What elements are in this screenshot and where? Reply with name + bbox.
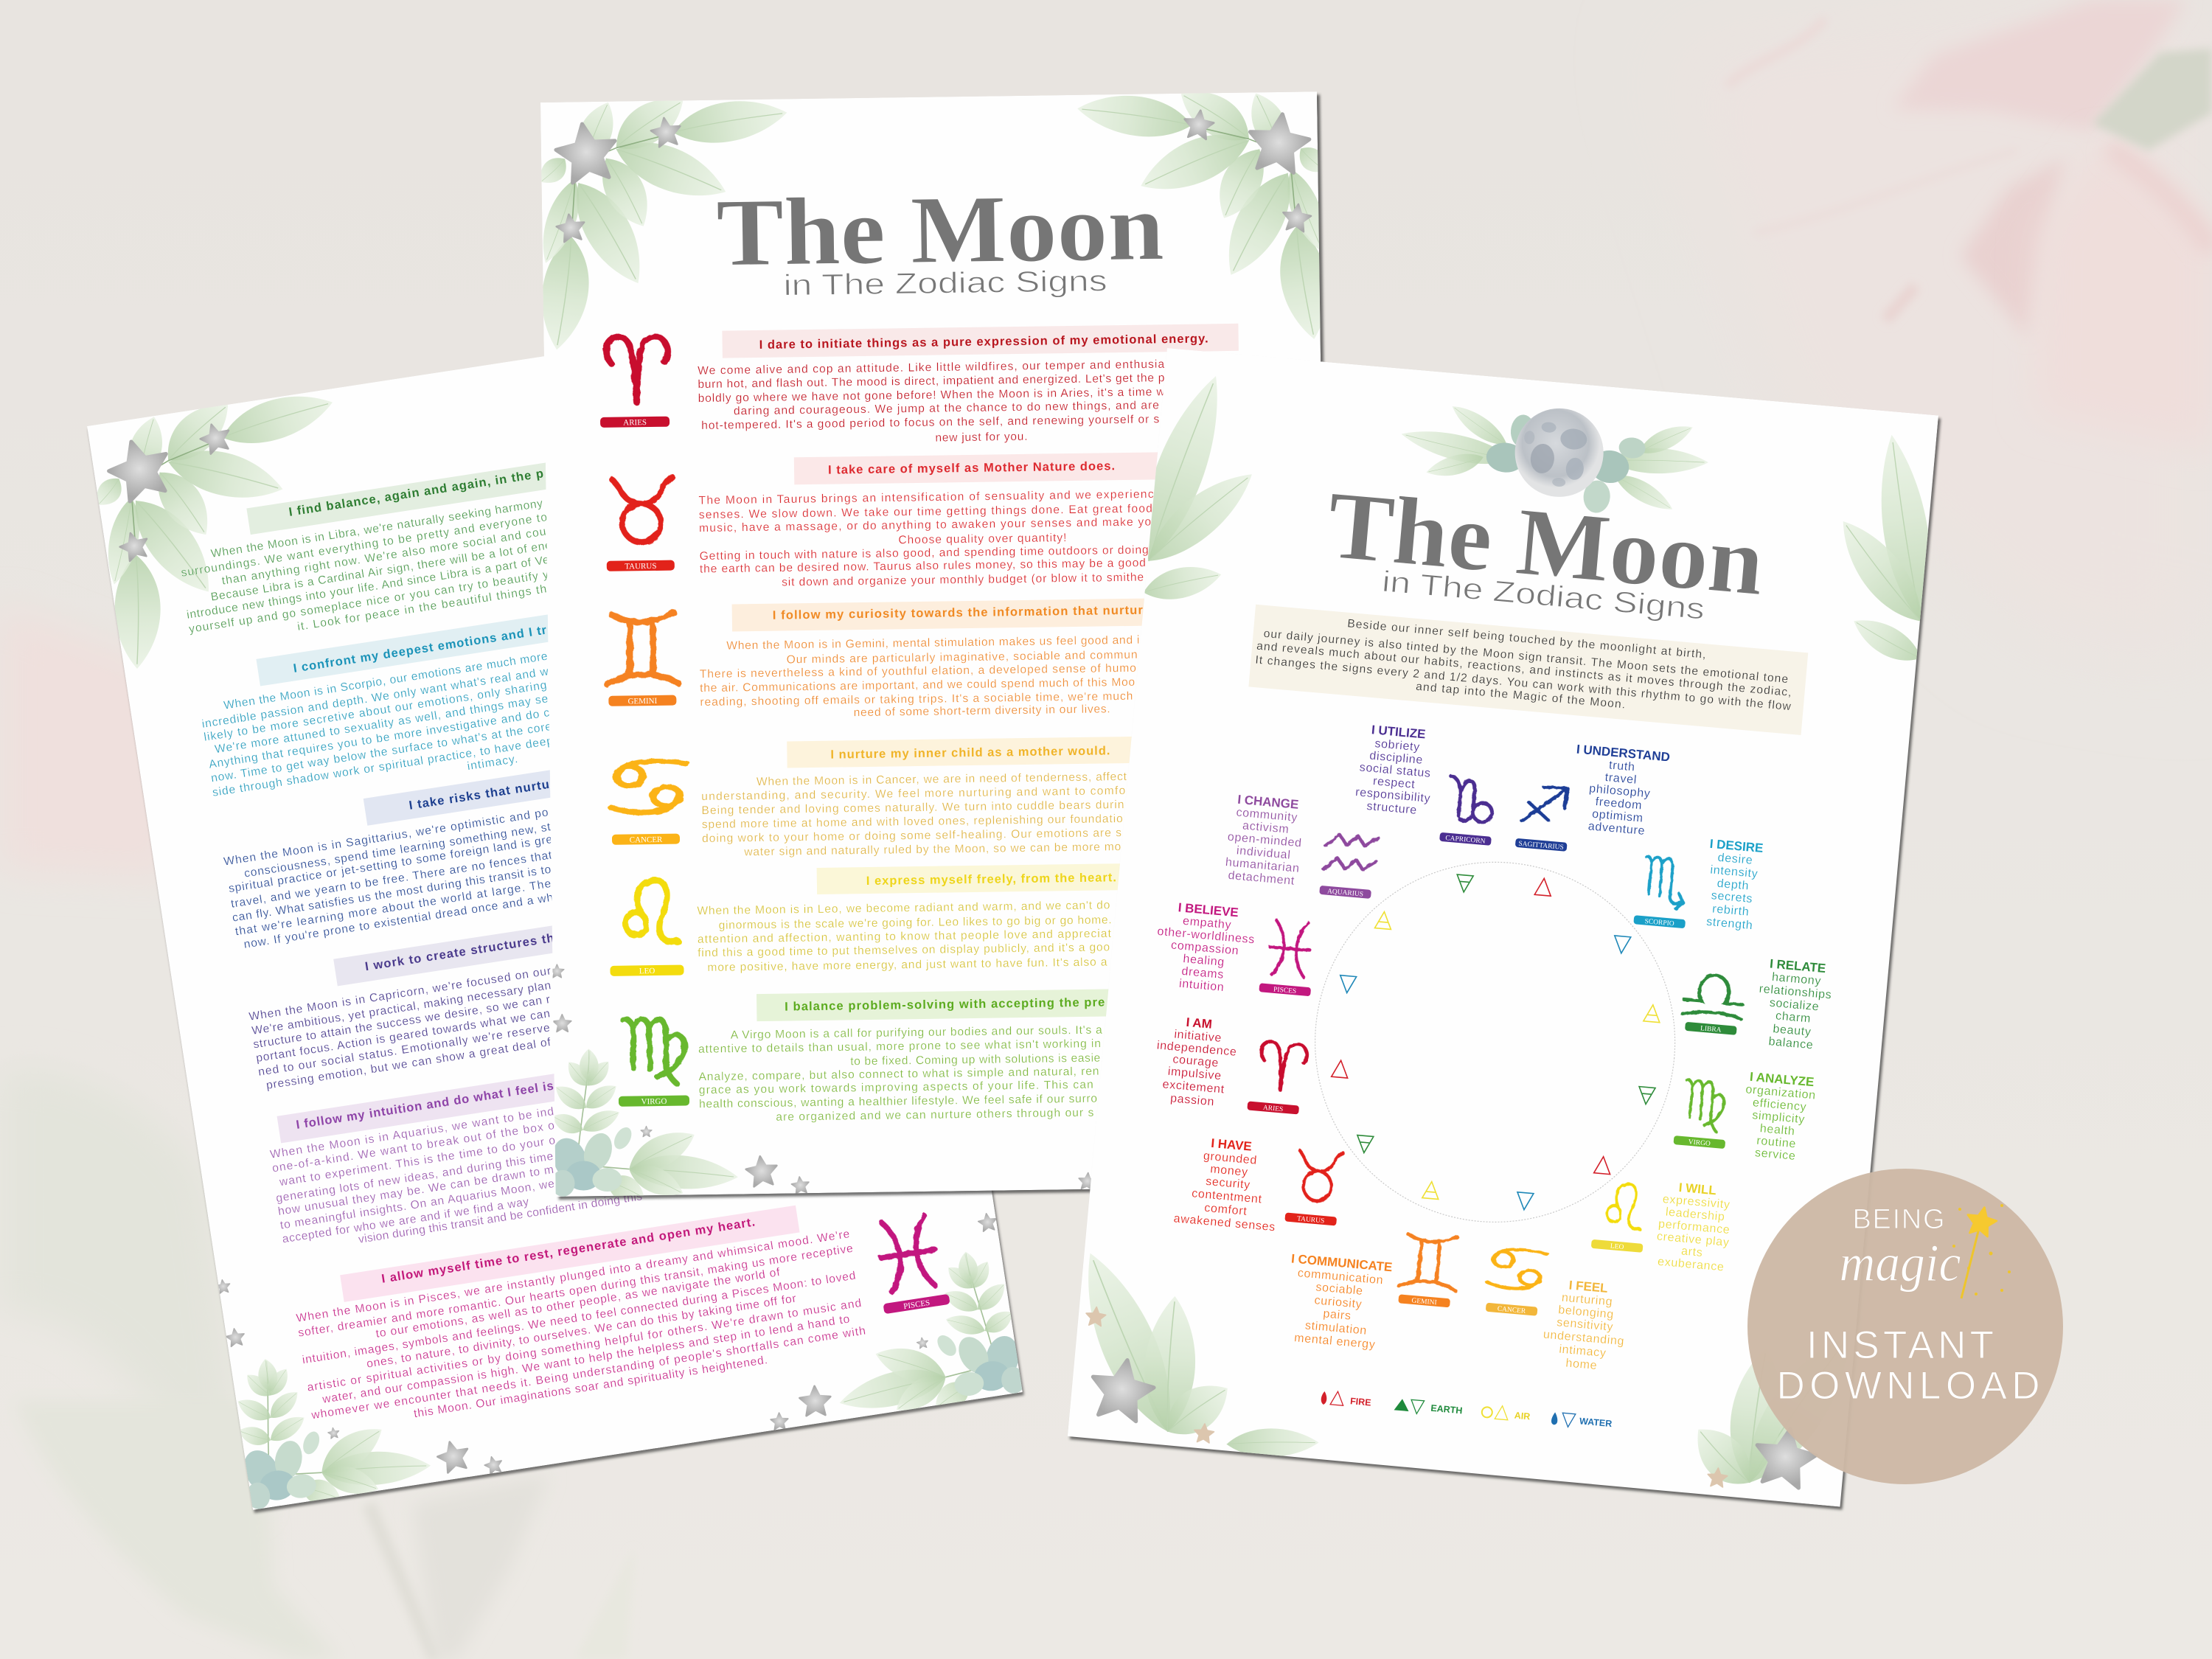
sign: Libra: balance (1768, 1035, 1814, 1051)
sign: Libra: socialize (1769, 997, 1820, 1013)
sign: Aries: courage (1172, 1053, 1220, 1070)
section: Libra (181, 463, 547, 636)
sign: Sagittarius: SAGITTARIUS (1518, 841, 1564, 852)
section: Aries: We come alive and cop an attitude. Like little wildfires, our temper and enthusia (698, 358, 1165, 378)
icon: Aries glyph (606, 336, 668, 403)
section: Capricorn: When the Moon is in Capricorn, we're focused on our (248, 964, 552, 1023)
subtitle: in The Zodiac Signs (783, 265, 1107, 302)
section: Virgo: Analyze, compare, but also connect to what is simple and natural, ren (698, 1065, 1099, 1083)
sign: Aries: independence (1156, 1039, 1237, 1059)
sign: Aquarius: AQUARIUS (1327, 888, 1363, 898)
badge: being magic instant download (1747, 1169, 2063, 1484)
sign: Pisces: intuition (1178, 978, 1225, 994)
section: Cancer (700, 737, 1135, 859)
sign: Capricorn: social status (1359, 761, 1431, 780)
sign: Virgo: VIRGO (1688, 1138, 1711, 1148)
section: Taurus: senses. We slow down. We take our time getting things done. Eat great food (699, 502, 1152, 521)
sign: Aries: impulsive (1167, 1065, 1222, 1082)
sign: Gemini (1284, 1222, 1461, 1358)
section: Scorpio: side through shadow work or spiritual practice, to have deep (212, 734, 554, 799)
icon: Leo glyph (625, 880, 678, 942)
label: DOWNLOAD: DOWNLOAD (1777, 1364, 2039, 1408)
intro text box: and reveals much about our habits, reactions, and instincts as it moves through the zodiac, (1256, 640, 1792, 699)
sign: Taurus: money (1210, 1163, 1248, 1179)
section: Taurus: the earth can be desired now. Taurus also rules money, so this may be a good (700, 557, 1146, 576)
sign: Leo: performance (1658, 1218, 1731, 1237)
sign: Sagittarius: adventure (1587, 820, 1646, 838)
section: Aquarius: When the Moon is in Aquarius, we want to be ind (269, 1105, 554, 1161)
section: Leo: When the Moon is in Leo, we become radiant and warm, and we can't do (697, 899, 1110, 917)
legend: elements: FIRE (1350, 1396, 1371, 1408)
section: Taurus: I take care of myself as Mother Nature does. (828, 459, 1115, 477)
sign: Gemini: sociable (1315, 1281, 1363, 1298)
label: Pisces: PISCES (902, 1298, 931, 1311)
section: Scorpio (202, 615, 550, 796)
section: Taurus: The Moon in Taurus brings an intensification of sensuality and we experienc (698, 488, 1154, 507)
section: Sagittarius: I take risks that nurtu (408, 778, 550, 813)
section: Gemini: Our minds are particularly imaginative, sociable and commun (787, 649, 1138, 666)
section: Pisces: When the Moon is in Pisces, we are instantly plunged into a dreamy and whimsical mood. We're (296, 1228, 850, 1325)
sign: Libra: harmony (1771, 971, 1822, 988)
sign: Cancer: nurturing (1561, 1292, 1613, 1309)
sign: Gemini: mental energy (1294, 1332, 1376, 1352)
sign: Leo (1590, 1173, 1734, 1274)
sign: Libra: charm (1775, 1009, 1812, 1026)
section: Scorpio: now. Time to get way below the surface to what's at the core (210, 720, 552, 785)
section: Leo: more positive, have more energy, and just want to have fun. It's also a (707, 956, 1107, 974)
sign: Aquarius: activism (1242, 819, 1290, 836)
section: Virgo: to be fixed. Coming up with solutions is easie (850, 1052, 1100, 1068)
section: Gemini: the air. Communications are important, and we could spend much of this Moo (700, 676, 1135, 695)
section: Gemini: There is nevertheless a kind of youthful elation, a developed sense of humo (700, 662, 1136, 681)
sign: Gemini: curiosity (1314, 1294, 1363, 1311)
sign: Scorpio: rebirth (1712, 902, 1750, 919)
sign: Scorpio: SCORPIO (1644, 918, 1674, 928)
sign: Libra: beauty (1773, 1023, 1812, 1039)
section: Libra: surroundings. We want everything to be pretty and everyone to (180, 511, 548, 580)
label: Aries: ARIES (623, 418, 647, 428)
section: Cancer: doing work to your home or doing some self-healing. Our emotions are s (702, 827, 1121, 845)
section: Pisces: I allow myself time to rest, regenerate and open my heart. (380, 1216, 756, 1286)
sign: Pisces: healing (1183, 953, 1225, 969)
sign: Aries: excitement (1162, 1078, 1225, 1096)
sign: Capricorn: sobriety (1374, 737, 1421, 754)
sign: Scorpio: strength (1705, 916, 1753, 932)
chart: zodiac wheel circle (1300, 847, 1690, 1237)
sign: Virgo: efficiency (1752, 1096, 1807, 1114)
sign: Aries: I AM (1186, 1015, 1213, 1032)
sign: Sagittarius (1515, 737, 1671, 860)
illustration: moon with eucalyptus (1394, 393, 1713, 522)
panel: right sheet, zodiac wheel (1047, 346, 1959, 1514)
section: Libra: Because Libra is a Cardinal Air sign, there will be a lot of ene (210, 539, 552, 604)
section: Aquarius (270, 1074, 641, 1243)
sign: Pisces: I BELIEVE (1178, 900, 1239, 919)
brand: magic script: magic (1839, 1234, 1961, 1293)
section: Sagittarius: can fly. What satisfies us the most during this transit is to (232, 863, 552, 925)
section: Pisces: softer, dreamier and more romantic. Our hearts open during this transit, making us more receptive (297, 1242, 854, 1340)
section: Libra: it. Look for peace in the beautiful things that (296, 581, 559, 633)
sign: Cancer: belonging (1558, 1304, 1615, 1321)
label: Pisces (883, 1294, 950, 1314)
section: Aquarius: accepted for who we are and if we find a way (282, 1196, 530, 1246)
section: Capricorn: We're ambitious, yet practical, making necessary plan (251, 979, 552, 1037)
section: Leo: attention and affection, wanting to know that people love and appreciat (698, 928, 1112, 946)
sign: Taurus: comfort (1204, 1202, 1248, 1218)
sign: Pisces: dreams (1181, 965, 1225, 981)
sign: Cancer: I FEEL (1568, 1278, 1608, 1295)
subtitle: in The Zodiac Signs (1381, 566, 1706, 626)
sign: Aquarius: individual (1236, 844, 1291, 862)
brand: BEING: BEING (1852, 1204, 1945, 1235)
sign: Cancer: understanding (1543, 1329, 1625, 1348)
section: Pisces: this Moon. Our imaginations soar and spirituality is heightened. (413, 1354, 768, 1420)
sign: Capricorn: discipline (1369, 750, 1424, 767)
sign: Capricorn (1352, 722, 1500, 846)
icon: Taurus glyph (611, 477, 672, 543)
sign: Capricorn: structure (1366, 800, 1418, 817)
sign: Virgo: health (1759, 1122, 1795, 1138)
section: Pisces (296, 1205, 866, 1419)
intro text box: It changes the signs every 2 and 1/2 days. You can work with this rhythm to go with the flow (1255, 654, 1792, 713)
legend: elements: EARTH (1430, 1403, 1463, 1416)
section: Aries (697, 324, 1240, 448)
sign: Taurus: security (1206, 1175, 1251, 1192)
sign: Libra: relationships (1759, 983, 1832, 1001)
section: Virgo: attentive to details than usual, more prone to see what isn't working in (698, 1037, 1101, 1056)
sign: Virgo: simplicity (1752, 1109, 1806, 1126)
sign: Cancer: CANCER (1497, 1306, 1526, 1315)
sign: Cancer (1481, 1247, 1632, 1374)
sign: Scorpio: desire (1717, 852, 1753, 867)
section: Taurus: Choose quality over quantity! (898, 532, 1067, 546)
section: Taurus: Getting in touch with nature is also good, and spending time outdoors or doing (700, 544, 1149, 563)
icon: magic wand (1952, 1204, 2011, 1298)
sign: Pisces: PISCES (1273, 986, 1297, 995)
section: Taurus: music, have a massage, or do anything to awaken your senses and make yo (699, 516, 1152, 535)
section: Sagittarius: spiritual practice or jet-setting to some foreign land is gre (228, 833, 553, 895)
section: Cancer: I nurture my inner child as a mother would. (830, 744, 1110, 762)
section: Sagittarius: now. If you're prone to existential dread once and a wh (243, 891, 554, 951)
sign: Leo: arts (1680, 1245, 1703, 1259)
section: Sagittarius: consciousness, spend time learning something new, st (243, 821, 552, 880)
sign: Aries: ARIES (1262, 1105, 1284, 1113)
chart: element triangles on the wheel (1321, 861, 1673, 1220)
section: Scorpio: When the Moon is in Scorpio, our emotions are much more (223, 650, 549, 712)
section: Aries: hot-tempered. It's a good period to focus on the self, and renewing yourself or s (701, 413, 1160, 432)
section: Sagittarius (223, 770, 552, 948)
section: Aquarius: want to experiment. This is the time to do your o (278, 1134, 556, 1189)
sign: Virgo: organization (1745, 1083, 1816, 1102)
section: Capricorn: structure to attain the success we desire, so we can r (252, 993, 551, 1051)
section: Aries: new just for you. (935, 431, 1028, 445)
section: Taurus: sit down and organize your monthly budget (or blow it to smithe (782, 571, 1144, 589)
section: Sagittarius: When the Moon is in Sagittarius, we're optimistic and po (223, 806, 549, 869)
section: Aquarius: to meaningful insights. On an Aquarius Moon, we (279, 1178, 555, 1232)
icon: Cancer glyph (611, 761, 686, 813)
sign: Sagittarius: optimism (1592, 808, 1644, 825)
sign: Sagittarius: freedom (1595, 796, 1643, 813)
label: Virgo: VIRGO (641, 1097, 667, 1106)
section: Pisces: artistic or spiritual activities or by doing something helpful for others. We're drawn to music and (306, 1297, 862, 1394)
section: Cancer: understanding, and security. We feel more nurturing and want to comfo (701, 785, 1126, 803)
title: The Moon (716, 173, 1165, 287)
intro text box: Beside our inner self being touched by the moonlight at birth, (1347, 617, 1706, 661)
section: Libra: I find balance, again and again, in the p (288, 467, 544, 519)
section: Scorpio: Anything that requires you to be more investigative and do c (208, 706, 551, 771)
sign: Sagittarius: truth (1608, 759, 1635, 773)
sign: Taurus: TAURUS (1297, 1215, 1325, 1225)
sign: Scorpio: I DESIRE (1709, 837, 1764, 855)
sign: Aquarius: detachment (1228, 869, 1295, 888)
sign: Taurus (1173, 1133, 1343, 1239)
sign: Gemini: stimulation (1304, 1319, 1368, 1338)
section: Cancer: water sign and naturally ruled by the Moon, so we can be more mo (743, 841, 1121, 858)
section: Scorpio: intimacy. (467, 753, 518, 773)
icon: Gemini glyph (606, 612, 679, 684)
section: Pisces: to our emotions, as well as to other people, as we navigate the world of (375, 1266, 781, 1340)
section: Cancer: When the Moon is in Cancer, we are in need of tenderness, affect (757, 771, 1127, 788)
section: Virgo: are organized and we can nurture others through our s (776, 1107, 1094, 1124)
section: Aries: boldly go where we have not gone before! When the Moon is in Aries, it's a time w (698, 386, 1166, 405)
sign: Aquarius: humanitarian (1225, 856, 1300, 875)
sign: Cancer: sensitivity (1557, 1316, 1614, 1334)
section: Taurus (698, 452, 1194, 590)
sign: Gemini: I COMMUNICATE (1290, 1251, 1393, 1274)
section: Aries: burn hot, and flash out. The mood is direct, impatient and energized. Let's get the p (698, 372, 1165, 391)
legend: elements: AIR (1514, 1411, 1531, 1422)
intro text box (1248, 605, 1808, 735)
sign: Virgo (1673, 1063, 1818, 1164)
sign: Leo: leadership (1665, 1206, 1725, 1223)
section: Capricorn: portant focus. Action is geared towards what we can (255, 1007, 551, 1065)
section: Leo: ginormous is the scale we're going for. Leo likes to go big or go home. (719, 914, 1112, 932)
sign: Leo: I WILL (1678, 1180, 1717, 1197)
sign: Pisces: empathy (1182, 915, 1232, 932)
label: Cancer (612, 834, 680, 845)
sign: Capricorn: CAPRICORN (1445, 835, 1486, 846)
intro text box: and tap into the Magic of the Moon. (1416, 681, 1626, 711)
sign: Capricorn: respect (1372, 775, 1416, 791)
sign: Taurus: I HAVE (1211, 1136, 1253, 1154)
sign: Gemini: GEMINI (1411, 1297, 1437, 1307)
sign: Sagittarius: I UNDERSTAND (1576, 742, 1671, 765)
section: Virgo: grace as you work towards improving aspects of your life. This can (699, 1079, 1093, 1096)
sign: Libra: I RELATE (1769, 956, 1826, 975)
sign: Cancer: intimacy (1559, 1343, 1607, 1360)
section: Gemini (699, 598, 1161, 721)
section: Aries: I dare to initiate things as a pure expression of my emotional energy. (759, 332, 1208, 352)
section: Scorpio: We're more attuned to sexuality as well, and things may se (214, 692, 549, 756)
sign: Cancer: home (1565, 1357, 1598, 1372)
section: Virgo (698, 989, 1127, 1124)
panel: left sheet, second half of the sign interpretations (75, 291, 1032, 1525)
section: Pisces: intuition, images, symbols and feelings. We need to feel connected during a Pisces Moon: to loved (302, 1270, 857, 1366)
section: Aquarius: one-of-a-kind. We want to break out of the box o (271, 1119, 555, 1175)
sign: Virgo: service (1754, 1147, 1796, 1163)
section: Libra: than anything right now. We're also more social and coul (221, 525, 550, 588)
sign: Scorpio: secrets (1711, 889, 1753, 905)
sign: Gemini: communication (1297, 1267, 1384, 1287)
section: Leo: I express myself freely, from the heart. (866, 871, 1116, 888)
section: Virgo: A Virgo Moon is a call for purifying our bodies and our souls. It's a (731, 1024, 1102, 1042)
label: Leo: LEO (639, 967, 655, 975)
label: Taurus (607, 560, 675, 571)
section: Gemini: reading, shooting off emails or taking trips. It's a sociable time, we're much (700, 690, 1133, 709)
sign: Aquarius (1223, 792, 1381, 900)
label: Gemini: GEMINI (627, 697, 658, 706)
label: Leo (610, 965, 684, 976)
section: Libra: introduce new things into your life. And since Libra is a part of Ver (186, 553, 554, 622)
section: Capricorn: ned to our social status. Emotionally we're reserve (257, 1022, 551, 1079)
label: INSTANT: INSTANT (1806, 1324, 1994, 1367)
section: Gemini: I follow my curiosity towards the information that nurtur (773, 604, 1144, 622)
sign: Aries: initiative (1174, 1028, 1222, 1045)
section: Leo: find this a good time to put themselves on display publicly, and it's a goo (698, 941, 1110, 959)
sign: Scorpio: depth (1717, 877, 1750, 893)
intro text box: our daily journey is also tinted by the Moon sign transit. The Moon sets the emotional tone (1263, 627, 1789, 686)
legend: elements: WATER (1579, 1416, 1613, 1429)
section: Aquarius: how unusual they may be. We can be drawn to m (277, 1164, 554, 1218)
label: Taurus: TAURUS (625, 562, 656, 571)
sign: Taurus: contentment (1192, 1187, 1262, 1206)
section: Cancer: Being tender and loving comes naturally. We turn into cuddle bears durin (701, 799, 1124, 817)
title: The Moon (1324, 471, 1768, 616)
icon: Virgo glyph (622, 1018, 685, 1085)
section: Capricorn (248, 926, 553, 1091)
sign: Capricorn: responsibility (1355, 786, 1431, 805)
sign: Scorpio (1633, 831, 1764, 935)
section: Virgo: I balance problem-solving with accepting the pre (785, 996, 1105, 1014)
section: Aquarius: vision during this transit and be confident in doing this (358, 1190, 643, 1246)
section: Aquarius: I follow my intuition and do what I feel is (295, 1079, 554, 1132)
section: Capricorn: I work to create structures th (364, 931, 555, 973)
label: Virgo (619, 1095, 689, 1107)
label: Cancer: CANCER (630, 835, 663, 845)
panel: middle sheet, The Moon in The Zodiac Signs (531, 75, 1349, 1210)
section: Leo (697, 863, 1143, 974)
section: Cancer: spend more time at home and with loved ones, replenishing our foundatio (702, 813, 1123, 831)
sign: Aquarius: I CHANGE (1237, 793, 1299, 812)
sign: Leo: exuberance (1657, 1256, 1725, 1274)
section: Sagittarius: travel, and we yearn to be free. There are no fences that (230, 849, 553, 911)
section: Sagittarius: that we're learning more about the world at large. The (234, 877, 552, 938)
legend: elements (1321, 1390, 1613, 1431)
label: Aries (600, 417, 669, 428)
sign: Taurus: grounded (1203, 1150, 1258, 1167)
sign: Virgo: routine (1756, 1135, 1797, 1150)
section: Libra: yourself up and go someplace nice or you can try to beautify yo (188, 567, 557, 636)
sign: Taurus: awakened senses (1173, 1212, 1276, 1234)
sign: Sagittarius: travel (1604, 771, 1638, 787)
section: Pisces: water, and our compassion is high. We want to help the helpless and step in to lend a hand to (321, 1313, 851, 1406)
sign: Virgo: I ANALYZE (1749, 1070, 1815, 1089)
label: Gemini (608, 695, 676, 706)
section: Scorpio: incredible passion and depth. We only want what's real and w (201, 665, 550, 731)
section: Gemini: When the Moon is in Gemini, mental stimulation makes us feel good and i (726, 634, 1139, 653)
section: Capricorn: pressing emotion, but we can show a great deal of (265, 1036, 552, 1092)
section: Virgo: health conscious, wanting a healthier lifestyle. We feel safe if our surro (699, 1093, 1097, 1110)
section: Scorpio: I confront my deepest emotions and I tr (293, 623, 548, 675)
sign: Leo: creative play (1656, 1231, 1730, 1249)
sign: Capricorn: I UTILIZE (1371, 723, 1426, 742)
decoration: botanical corners (1047, 363, 1958, 1514)
sign: Libra (1680, 950, 1834, 1053)
section: Pisces: ones, to nature, to divinity, to ourselves. We can do this by taking time off for (366, 1293, 797, 1371)
sign: Pisces: compassion (1170, 939, 1239, 958)
sign: Leo: LEO (1610, 1243, 1624, 1251)
sign: Gemini: pairs (1323, 1307, 1352, 1323)
section: Scorpio: likely to be more secretive about our emotions, only sharing (203, 679, 548, 744)
sign: Sagittarius: philosophy (1589, 782, 1651, 800)
section: Aries: daring and courageous. We jump at the chance to do new things, and are (734, 399, 1159, 417)
sign: Libra: LIBRA (1700, 1025, 1722, 1034)
sign: Aries: passion (1169, 1092, 1215, 1108)
sign: Aquarius: open-minded (1227, 831, 1302, 849)
section: Libra: When the Moon is in Libra, we're naturally seeking harmony (210, 497, 543, 560)
sign: Aquarius: community (1236, 807, 1298, 824)
sign: Scorpio: intensity (1710, 863, 1759, 880)
section: Gemini: need of some short-term diversity in our lives. (854, 703, 1110, 719)
section: Pisces: whomever we encounter that needs it. Being understanding of people's shortfalls can come with (310, 1324, 866, 1422)
icon: Pisces glyph (876, 1215, 940, 1293)
sign: Pisces (1152, 899, 1318, 1001)
sign: Leo: expressivity (1662, 1193, 1731, 1211)
sign: Pisces: other-worldliness (1157, 925, 1256, 946)
section: Aquarius: generating lots of new ideas, and during this time (275, 1150, 554, 1205)
sign: Aries (1152, 1013, 1310, 1116)
